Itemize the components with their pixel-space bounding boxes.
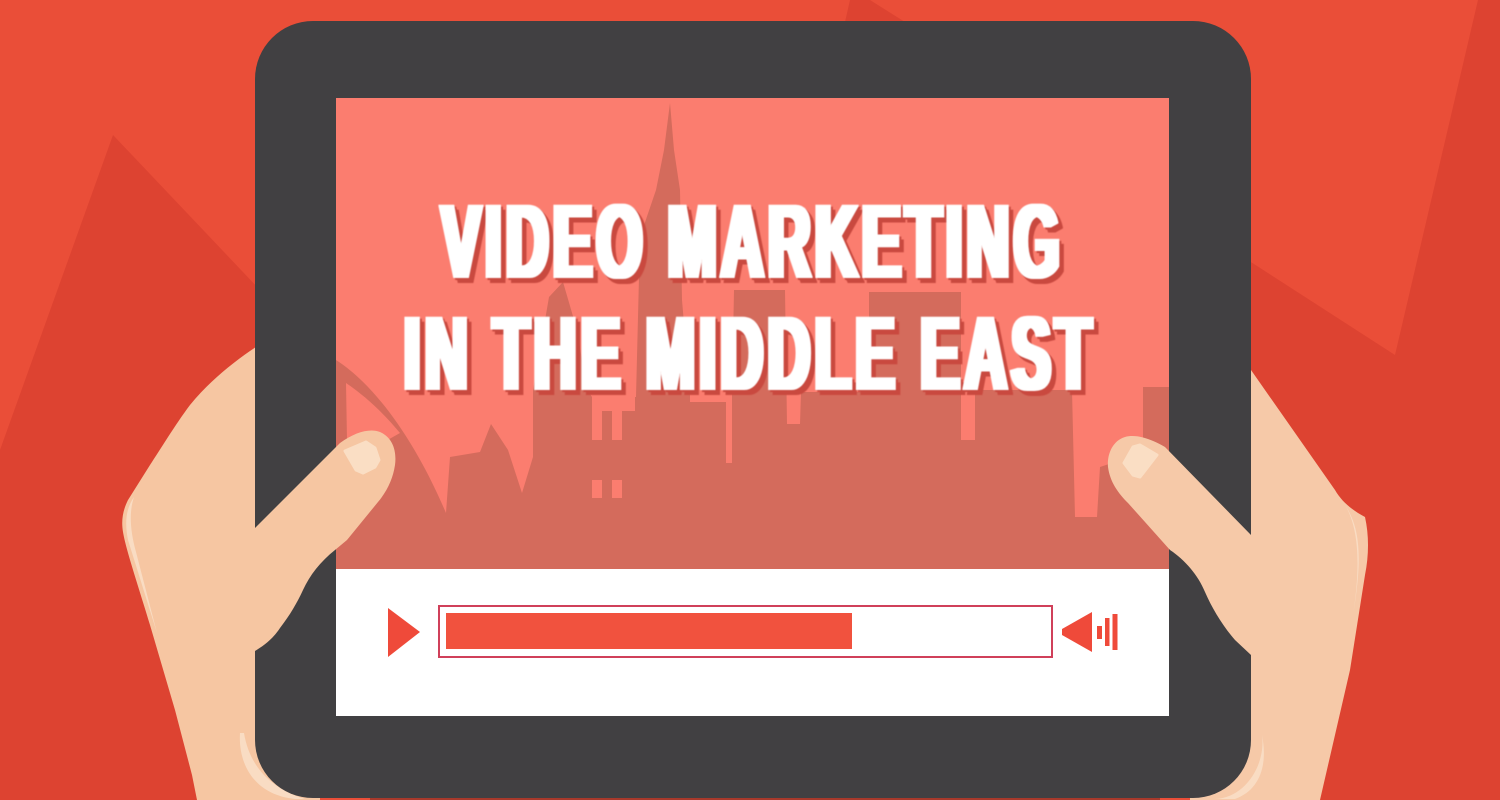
left thumb [255, 430, 395, 651]
progress bar fill [446, 613, 852, 649]
title: IN THE MIDDLE EAST [404, 294, 1096, 412]
icon: play button [388, 608, 420, 657]
city skyline [336, 103, 1169, 569]
progress bar track [439, 606, 1052, 657]
title [404, 182, 1096, 412]
hand highlights [126, 497, 1359, 799]
right thumb [1108, 436, 1251, 655]
left thumbnail [345, 442, 379, 473]
tablet body [255, 21, 1251, 798]
icon: speaker [1062, 612, 1118, 652]
right thumbnail [1124, 445, 1157, 477]
right hand palm [1190, 358, 1368, 800]
tablet screen [336, 98, 1169, 569]
title: VIDEO MARKETING [442, 182, 1064, 300]
player control bar [336, 569, 1169, 716]
left hand palm [122, 343, 320, 800]
